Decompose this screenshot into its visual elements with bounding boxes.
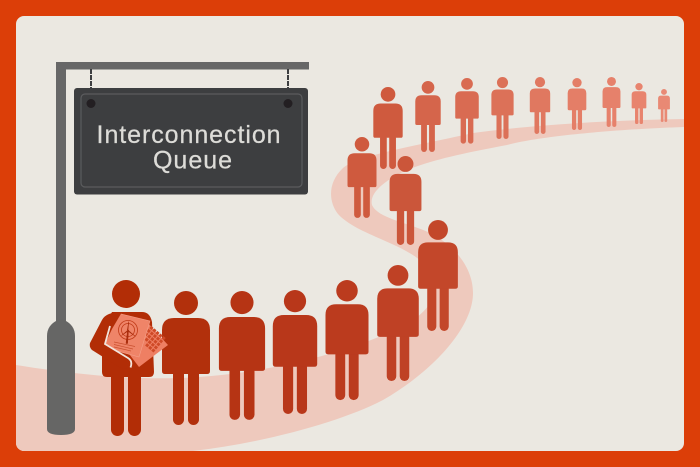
post base: [47, 320, 75, 435]
queue person 7: [418, 220, 458, 331]
queue person 4: [273, 290, 317, 414]
queue person 14: [530, 77, 550, 134]
winding queue path: [16, 119, 684, 451]
queue person 5: [325, 280, 369, 400]
front person holding documents: [90, 280, 168, 436]
queue person 15: [568, 78, 586, 130]
queue person 11: [415, 81, 441, 152]
queue person 3: [219, 291, 265, 420]
queue person 6: [377, 265, 419, 381]
queue person 13: [491, 77, 514, 139]
queue person 2: [162, 291, 210, 425]
sign board: [74, 88, 308, 194]
queue person 8: [390, 156, 421, 245]
post: [56, 62, 66, 324]
document: wind turbine plan: [103, 313, 150, 357]
arm: [90, 312, 131, 369]
sign title: Queue: [153, 146, 232, 174]
sign title: Interconnection: [97, 121, 281, 149]
front person figure: [102, 280, 154, 436]
arm bracket: [56, 62, 309, 70]
queue person 10: [373, 87, 403, 169]
queue person 12: [455, 78, 479, 144]
hanging chains: [91, 69, 288, 88]
signpost: [47, 62, 309, 435]
queue person 17: [632, 83, 646, 124]
sign bolts: [86, 99, 292, 108]
queue person 16: [603, 77, 620, 127]
queue person 18: [658, 89, 670, 122]
icon: wind turbine: [118, 320, 138, 344]
document: solar panel plan: [126, 322, 168, 367]
queue person 9: [348, 137, 376, 218]
